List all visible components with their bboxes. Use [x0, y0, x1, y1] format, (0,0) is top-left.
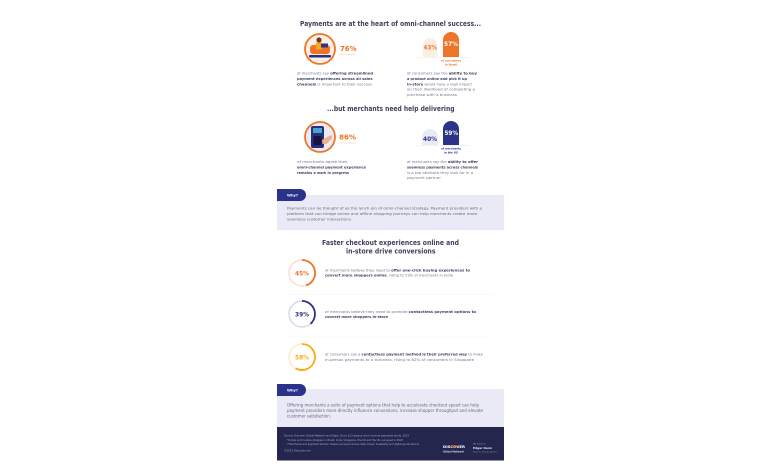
heading: merchants need help: ...but merchants need help delivering [327, 105, 454, 113]
chart: 40% vs 59% of merchants: 59% [444, 131, 458, 137]
partner credit: Edgar Dunn [473, 446, 492, 450]
explanation text [287, 402, 483, 418]
text: contactless options: convert more shoppers in-store [325, 315, 389, 319]
explanation text: customer satisfaction. [287, 414, 331, 418]
donut: 45% [289, 260, 315, 286]
donut: 39%: 39% [295, 311, 309, 318]
chart: 40% vs 59% of merchants [415, 121, 470, 154]
donut: 45%: 45% [295, 270, 309, 277]
footnotes: Source: Discover Global Network and Edgar, Dunn & Company omni-channel payments study, 2023 [284, 434, 410, 438]
why tab: Why? [287, 388, 298, 392]
why tab [277, 189, 306, 201]
text: 86% of merchants: omni-channel payment experience [297, 166, 367, 170]
heading: faster checkout: Faster checkout experiences online and [322, 239, 459, 247]
explanation text [287, 206, 482, 221]
text: 76% of merchants: channels is important to their success [297, 82, 372, 86]
chart: 43% vs 57% of consumers: 57% [444, 42, 458, 48]
donut: 58% [289, 344, 315, 370]
donut: 39% [289, 301, 315, 327]
chart: 40% vs 59% of merchants: 40% [423, 137, 437, 143]
logo: Discover Global Network: Global Network [443, 450, 464, 454]
footnotes: **Merchants and payment decision makers surveyed across retail, travel, hospitality and digital goods sectors [287, 443, 420, 446]
text: preferred contactless: in-person payments to a business, rising to 82% of consumers in Singapore [325, 358, 475, 362]
text: 86% of merchants [297, 160, 367, 175]
heading: faster checkout [322, 239, 459, 256]
text: 76% of merchants [297, 72, 373, 86]
panel: why explanation one [277, 189, 504, 230]
chart: 43% vs 57% of consumers: of consumers [441, 58, 462, 62]
stat: 86%: 86% [339, 133, 356, 142]
text: contactless options: of merchants believe they need to promote contactless payment options to [325, 310, 477, 314]
footnotes: ©2023 Discover.com [284, 450, 312, 452]
explanation text: Payments can be thought of as the lynch pin of omni-channel strategy. Payment providers with a [287, 206, 482, 210]
text: contactless options [325, 310, 477, 319]
text: 57% of consumers: in-store would have a high impact [407, 82, 473, 86]
text: 76% of merchants: payment experiences across all sales [297, 77, 372, 81]
text: one-click buying: convert more shoppers online , rising to 53% of merchants in India [325, 274, 453, 278]
why tab [277, 384, 306, 396]
footer [277, 427, 504, 460]
partner credit: Payments Strategy Advisors [473, 450, 497, 454]
text: 59% of merchants [407, 160, 478, 180]
explanation text: seamless customer interactions. [287, 217, 352, 221]
footnotes [284, 434, 420, 452]
text: 59% of merchants: is a top attribute they look for in a [407, 171, 473, 175]
text: 59% of merchants: payment partner [407, 176, 442, 180]
partner credit: We thank to [473, 442, 486, 446]
explanation text: payment providers more directly influence conversions, increase shopper throughput and elevate [287, 408, 483, 413]
icon: payment terminal in orange ring [305, 122, 335, 152]
explanation text: Offering merchants a suite of payment options that help to accelerate checkout speed can help [287, 402, 479, 408]
chart: 43% vs 57% of consumers: 43% [424, 46, 437, 52]
text: 57% of consumers: of consumers say the ability to buy [407, 72, 478, 76]
logo: Discover Global Network [443, 445, 465, 454]
heading: faster checkout: in-store drive conversions [346, 248, 436, 256]
text: 86% of merchants: remains a work in progress [297, 171, 349, 175]
logo: Discover Global Network: DISCOVER [443, 445, 465, 449]
chart: 43% vs 57% of consumers: in Brazil [445, 62, 457, 66]
chart: 40% vs 59% of merchants: of merchants [441, 146, 461, 150]
text: 59% of merchants: seamless payments across channels [407, 165, 478, 169]
text: 86% of merchants: of merchants agree their [297, 160, 349, 164]
title: omni-channel success: Payments are at the heart of omni-channel success... [300, 20, 481, 28]
text: 57% of consumers: a product online and pick it up [407, 77, 467, 81]
text: one-click buying [325, 268, 471, 278]
text: 76% of merchants: of merchants say offering streamlined [297, 72, 373, 76]
text: 57% of consumers: on their likelihood of completing a [407, 88, 475, 92]
why tab: Why? [287, 194, 298, 198]
text: preferred contactless [325, 353, 484, 362]
text: 59% of merchants: of merchants say the ability to offer [407, 160, 478, 164]
text: 57% of consumers [407, 72, 478, 97]
chart: 43% vs 57% of consumers [415, 32, 470, 66]
footnotes: *Online and in-store shoppers in Brazil, India, Singapore, the UK and the US, surveyed in 2023 [287, 439, 404, 442]
explanation text: platform that can bridge online and offline shopping journeys can help merchants create more [287, 212, 478, 216]
text: one-click buying: of merchants believe they need to offer one-click buying experiences to [325, 268, 471, 272]
text: preferred contactless: of consumers say a contactless payment method is their preferred way to make [325, 353, 484, 357]
donut: 58%: 58% [295, 354, 309, 361]
chart: 40% vs 59% of merchants: in the US [444, 150, 458, 154]
panel: why explanation two [277, 384, 504, 427]
text: 57% of consumers: purchase with a business [407, 93, 457, 97]
stat: 76%: 76% [340, 44, 356, 53]
icon: merchant seated in orange ring [305, 34, 335, 64]
partner credit [473, 442, 497, 454]
